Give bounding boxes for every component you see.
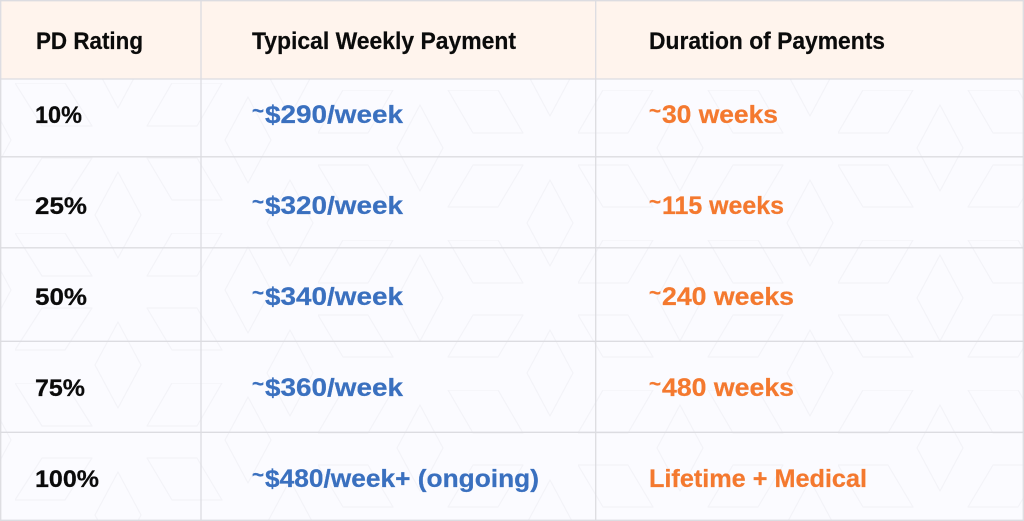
row: 25%: 115 weeks [662,192,784,220]
row: 50%: $340/week [265,283,403,311]
row: 100%: 100% [35,466,99,493]
row: 50%: ~ [252,282,264,305]
row: 75%: ~ [252,373,264,396]
row: 75%: $360/week [265,374,403,402]
row: 100%: Lifetime + Medical [649,465,867,493]
header row [0,0,1024,79]
row: 75%: ~ [649,373,661,396]
row: 100% [35,464,867,493]
row: 25%: 25% [35,193,87,220]
row: 25%: ~ [252,191,264,214]
row: 25% [35,191,784,220]
row: 10%: 30 weeks [662,101,778,129]
row: 10%: $290/week [265,101,403,129]
row: 50% [35,282,794,311]
row: 10% [35,100,778,129]
row: 100%: $480/week+ (ongoing) [265,465,539,493]
row: 10%: ~ [252,100,264,123]
row: 50%: ~ [649,282,661,305]
row: 75% [35,373,794,402]
header: Duration of Payments: Duration of Payments [649,28,885,55]
header: Typical Weekly Payment: Typical Weekly Payment [252,28,516,55]
row: 25%: ~ [649,191,661,214]
row: 100%: ~ [252,464,264,487]
row: 25%: $320/week [265,192,403,220]
row: 10%: 10% [35,102,82,129]
row: 75%: 480 weeks [662,374,794,402]
row: 50%: 50% [35,284,87,311]
row: 75%: 75% [35,375,85,402]
row: 10%: ~ [649,100,661,123]
row: 50%: 240 weeks [662,283,794,311]
header: PD Rating: PD Rating [36,28,143,55]
